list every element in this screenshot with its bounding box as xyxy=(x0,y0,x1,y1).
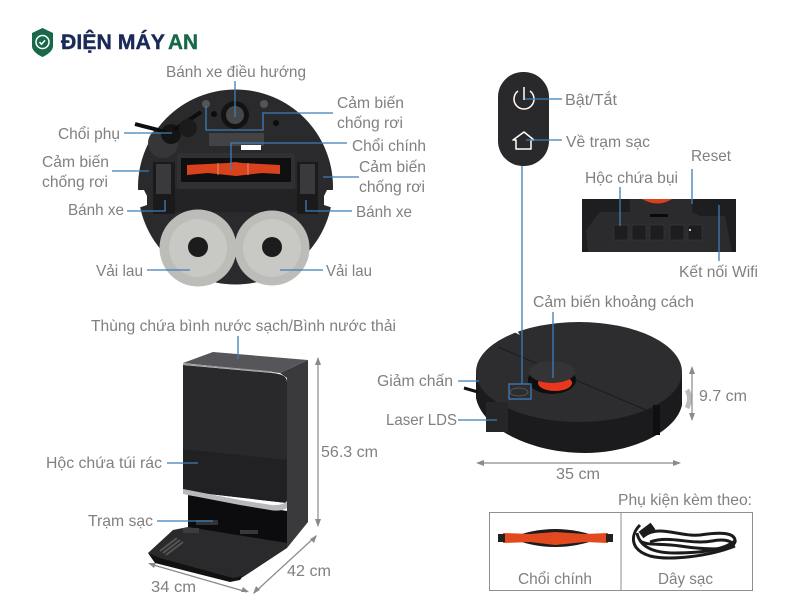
robot top view illustration xyxy=(464,322,690,453)
dock dimension arrows xyxy=(148,357,321,594)
label: Thùng chứa bình nước sạch/Bình nước thải: Thùng chứa bình nước sạch/Bình nước thải xyxy=(91,318,396,335)
label: Chổi phụ: Chổi phụ xyxy=(58,125,120,143)
label: Chổi chính: Chổi chính xyxy=(352,137,426,155)
label: Chổi chính accessory: Chổi chính xyxy=(518,570,592,588)
robot dimension arrows xyxy=(476,366,695,466)
label: Hộc chứa bụi: Hộc chứa bụi xyxy=(585,170,678,187)
label: Giảm chấn: Giảm chấn xyxy=(377,373,453,390)
highlighted button area xyxy=(509,384,531,399)
icon: power xyxy=(514,87,534,109)
label: Vải lau right: Vải lau xyxy=(326,263,372,280)
mop pads xyxy=(160,210,310,286)
dock callout lines xyxy=(157,336,238,521)
label: Kết nối Wifi: Kết nối Wifi xyxy=(679,264,758,281)
button callout lines xyxy=(522,99,719,384)
accessories box xyxy=(490,512,752,591)
label: Hộc chứa túi rác: Hộc chứa túi rác xyxy=(46,455,162,472)
logo: AN xyxy=(168,31,198,54)
logo xyxy=(32,28,198,57)
label: Cảm biến chống rơi left: chống rơi xyxy=(42,174,108,191)
robot underside illustration xyxy=(135,90,333,286)
label: 56.3 cm: 56.3 cm xyxy=(321,444,378,461)
label: Cảm biến chống rơi top right: Cảm biến xyxy=(337,95,404,112)
label: Cảm biến chống rơi top right xyxy=(337,95,404,132)
label: Cảm biến chống rơi right xyxy=(359,159,426,196)
label: Cảm biến chống rơi top right: chống rơi xyxy=(337,115,403,132)
label: Về trạm sạc: Về trạm sạc xyxy=(566,134,650,151)
label: Phụ kiện kèm theo: Phụ kiện kèm theo: xyxy=(618,492,752,509)
icon: main brush xyxy=(498,529,613,547)
robot callout lines xyxy=(458,312,553,420)
logo: ĐIỆN MÁY xyxy=(61,30,165,54)
icon: power cable xyxy=(633,525,736,558)
laser turret xyxy=(528,361,576,394)
label: Bánh xe điều hướng: Bánh xe điều hướng xyxy=(166,64,306,81)
charging dock illustration xyxy=(148,352,308,582)
label: Cảm biến chống rơi left: Cảm biến xyxy=(42,154,109,171)
label: 35 cm: 35 cm xyxy=(556,466,600,483)
label: 34 cm: 34 cm xyxy=(151,579,196,596)
top panel buttons photo xyxy=(582,199,736,252)
label: Bánh xe right: Bánh xe xyxy=(356,204,412,221)
callout lines: robot underside xyxy=(112,81,359,270)
label: Cảm biến khoảng cách: Cảm biến khoảng cách xyxy=(533,294,694,311)
main brush bay xyxy=(177,153,295,189)
icon: home xyxy=(513,132,534,149)
label: Reset: Reset xyxy=(691,148,732,165)
label: Trạm sạc: Trạm sạc xyxy=(88,513,153,530)
label: Bánh xe left: Bánh xe xyxy=(68,202,124,219)
label: Cảm biến chống rơi right: chống rơi xyxy=(359,179,425,196)
drive wheels xyxy=(153,162,318,214)
label: Cảm biến chống rơi right: Cảm biến xyxy=(359,159,426,176)
label: Bật/Tắt: Bật/Tắt xyxy=(565,90,618,109)
caster wheel xyxy=(221,101,249,129)
button pill xyxy=(498,72,549,166)
label: 42 cm: 42 cm xyxy=(287,563,331,580)
label: Vải lau left: Vải lau xyxy=(96,263,143,280)
label: Cảm biến chống rơi left xyxy=(42,154,109,191)
side brush xyxy=(135,112,201,158)
label: Dây sạc: Dây sạc xyxy=(658,571,713,588)
label: Laser LDS: Laser LDS xyxy=(386,412,457,429)
label: 9.7 cm: 9.7 cm xyxy=(699,388,747,405)
